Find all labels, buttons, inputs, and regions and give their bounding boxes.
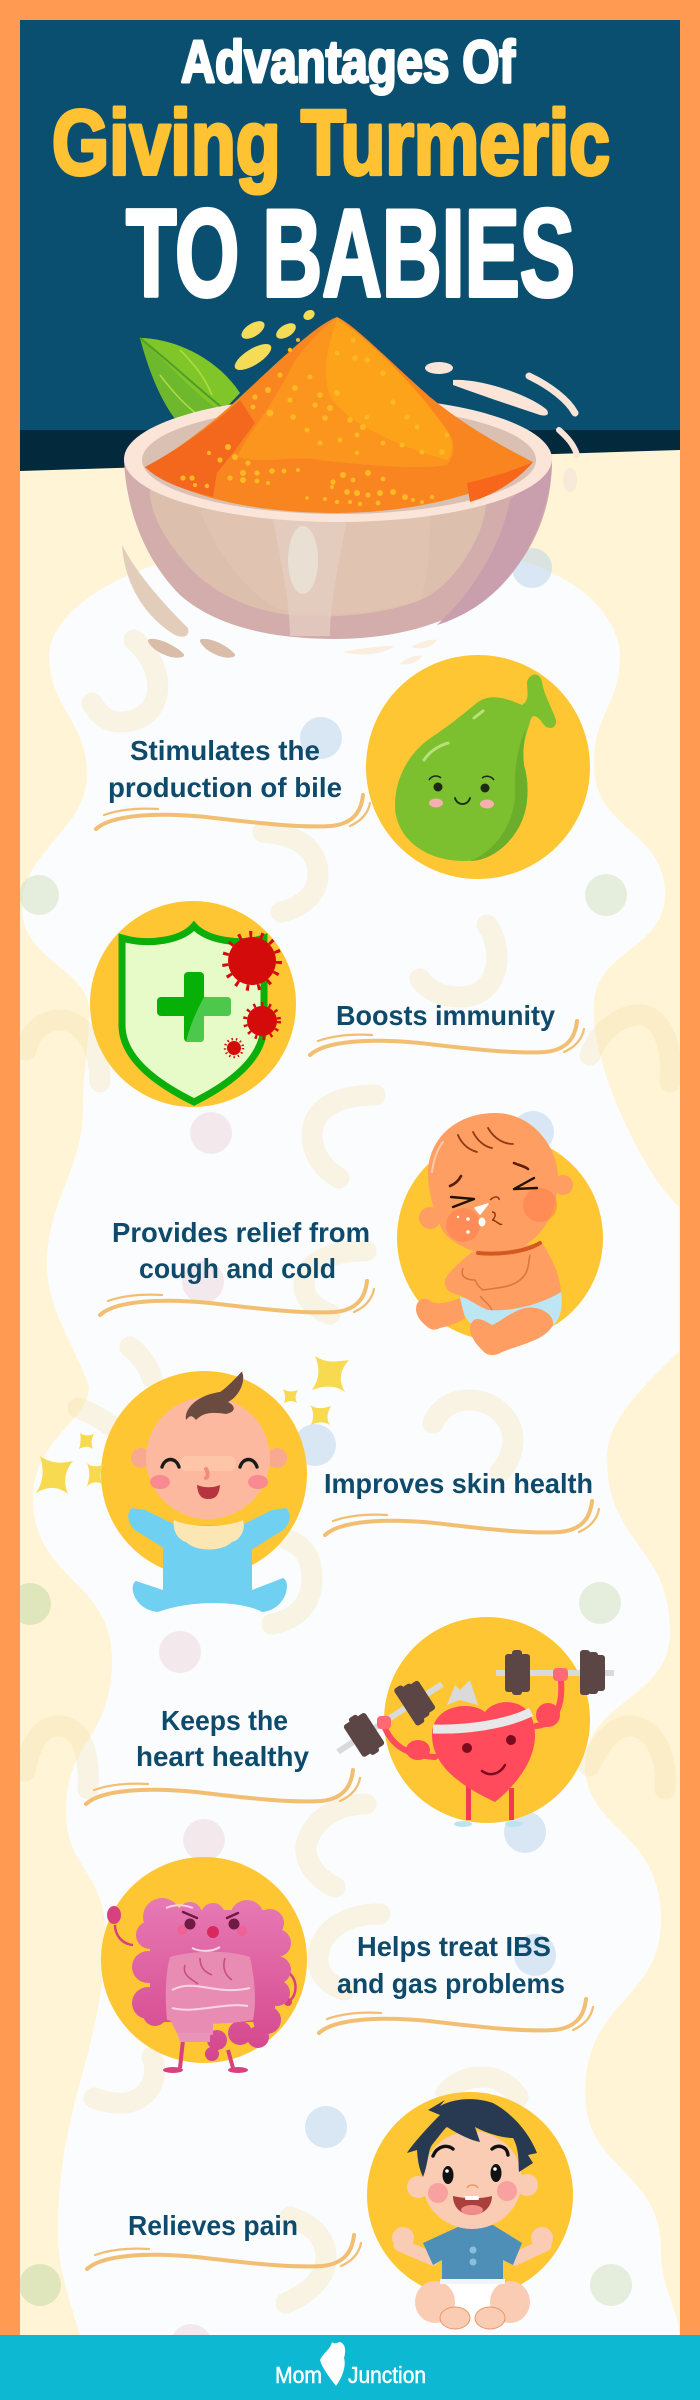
logo: Junction <box>348 2362 426 2388</box>
benefit 6: IBS and gas <box>101 1857 593 2073</box>
sparkles <box>36 1356 349 1494</box>
yellow circle <box>366 655 590 879</box>
icon: sneezing baby <box>416 1113 573 1355</box>
yellow circle <box>101 1371 307 1577</box>
swoosh underline <box>310 1021 584 1055</box>
title: Advantages Of <box>181 29 515 95</box>
label <box>108 735 342 803</box>
label: Improves skin health <box>324 1468 593 1499</box>
yellow circle <box>397 1135 603 1341</box>
leaf <box>140 338 240 438</box>
label: production of bile <box>108 772 342 803</box>
swoosh underline <box>86 1770 360 1804</box>
yellow and cream flecks <box>231 308 577 492</box>
label: cough and cold <box>139 1253 336 1284</box>
bowl body <box>124 460 552 639</box>
label: and gas problems <box>337 1968 565 1999</box>
icon: bowl of turmeric powder <box>122 308 577 665</box>
label: Helps treat IBS <box>357 1931 551 1962</box>
yellow circle <box>90 901 296 1107</box>
tan and cream drips below bowl <box>122 545 437 665</box>
label <box>112 1217 370 1284</box>
icon: heart lifting dumbbells <box>326 1650 614 1827</box>
background: cream panel <box>20 440 680 2340</box>
swoosh underline <box>100 1281 374 1315</box>
icon: shield with viruses <box>122 926 279 1102</box>
icon: intestines character <box>107 1898 296 2073</box>
benefit 7: relieves pain <box>87 2092 573 2329</box>
icon: gallbladder <box>395 674 556 861</box>
swoosh underline <box>319 1999 593 2033</box>
header panel <box>20 20 680 471</box>
swoosh underline <box>87 2235 361 2269</box>
label: Boosts immunity <box>336 1000 555 1031</box>
virus particles <box>225 934 279 1057</box>
icon: smiling boy <box>392 2099 553 2329</box>
title <box>52 29 610 323</box>
benefit 4: skin health <box>36 1356 599 1612</box>
swoosh underline <box>96 795 370 829</box>
benefit 3: cough and cold <box>100 1113 603 1355</box>
benefit 5: heart healthy <box>86 1617 614 1827</box>
yellow circle <box>367 2092 573 2298</box>
yellow circle <box>101 1857 307 2063</box>
benefit 2: boosts immunity <box>90 901 584 1107</box>
label <box>337 1931 565 1999</box>
powder speckles <box>180 338 449 506</box>
label: Keeps the <box>161 1705 288 1736</box>
background: white wavy ribbon <box>22 535 679 2335</box>
logo <box>275 2342 426 2388</box>
icon: happy baby <box>128 1371 290 1612</box>
logo: Mom <box>275 2362 322 2388</box>
benefit 1: stimulates bile <box>96 655 590 879</box>
label: heart healthy <box>136 1741 309 1772</box>
label: Stimulates the <box>130 735 320 766</box>
bowl rim <box>124 396 552 522</box>
footer bar <box>0 2335 700 2400</box>
label: Provides relief from <box>112 1217 370 1248</box>
yellow circle <box>384 1617 590 1823</box>
swoosh underline <box>325 1501 599 1535</box>
label <box>136 1705 309 1772</box>
label: Relieves pain <box>128 2210 298 2241</box>
turmeric powder pile <box>145 317 533 513</box>
